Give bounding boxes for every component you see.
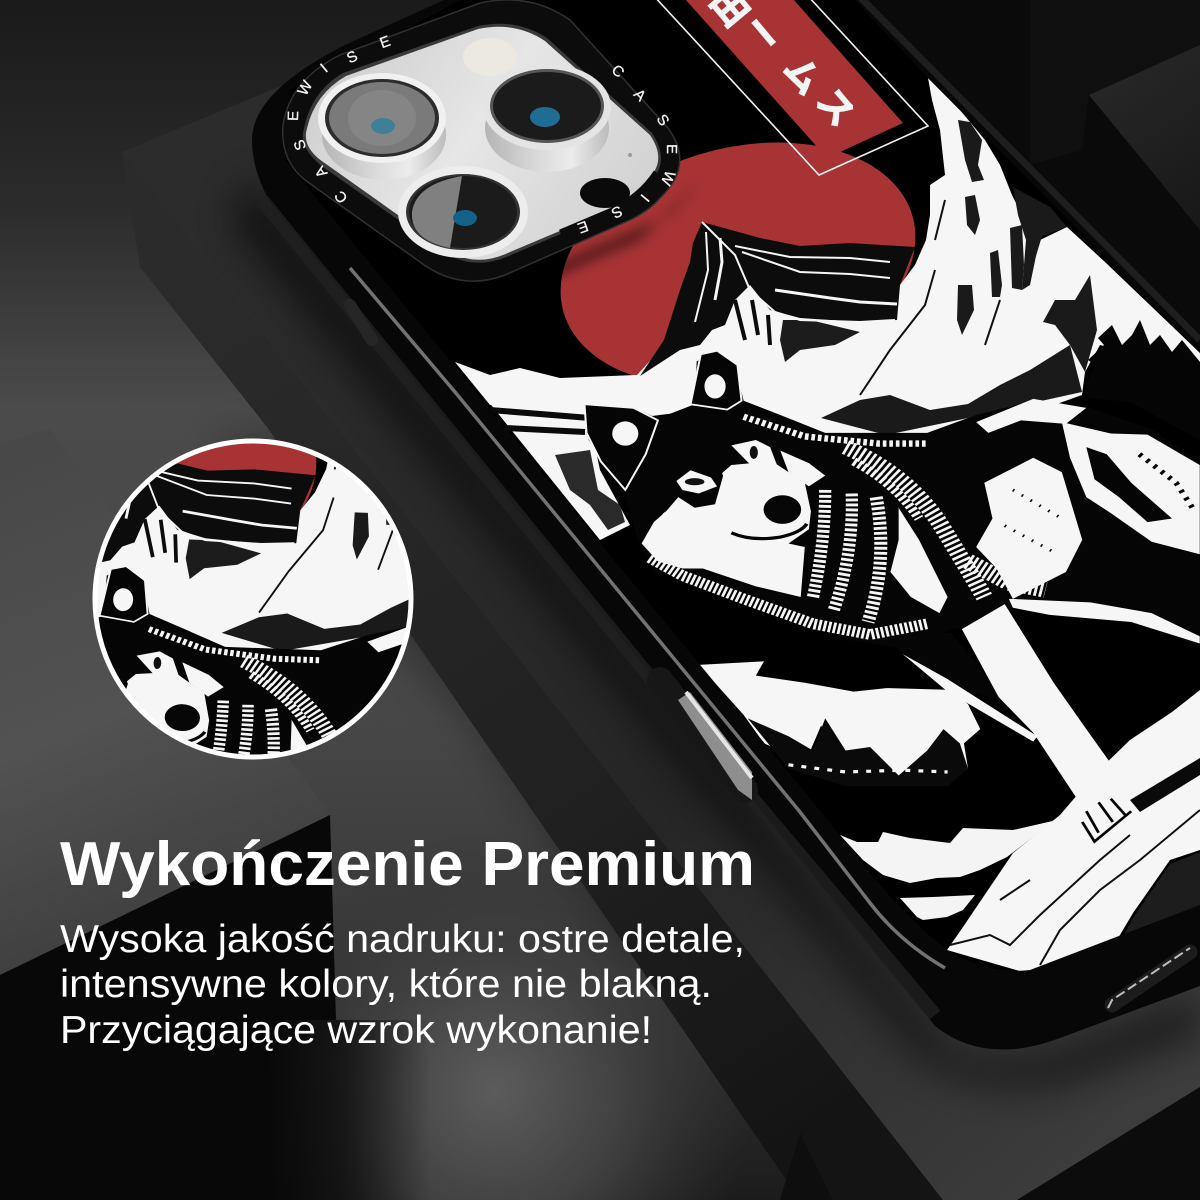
paw toes [1082, 799, 1131, 842]
left ear [584, 404, 658, 490]
flash [463, 38, 517, 76]
microphone hole [580, 178, 630, 208]
wolf [584, 351, 1200, 842]
CASEWISE ring text: W [295, 77, 317, 99]
description text: intensywne kolory, które nie blakną. [60, 963, 712, 1006]
wolf body silhouette [584, 351, 1200, 647]
CASEWISE ring text: W [656, 168, 678, 189]
CASEWISE ring text: I [317, 61, 331, 76]
label characters: ス [808, 80, 863, 134]
white outline frame [653, 0, 928, 175]
face [642, 461, 811, 597]
description text: Przyciągające wzrok wykonanie! [60, 1009, 652, 1052]
side slot [402, 375, 478, 470]
case body [252, 0, 1200, 1050]
right ear patch [704, 374, 726, 399]
dark central mountain [640, 222, 915, 376]
leg inner strip [903, 654, 1037, 742]
snow mountains [455, 78, 1200, 440]
mountain smudge below ridge [780, 320, 860, 362]
rear belly band [1009, 599, 1200, 643]
island outer ring [283, 0, 680, 281]
small rocks lower left [840, 820, 1057, 920]
hip specks [1005, 490, 1062, 554]
ring lower right cover [560, 172, 656, 232]
CASEWISE ring text [285, 33, 680, 236]
right eye patch [731, 440, 778, 470]
lens: telephoto [398, 166, 528, 258]
right eye pupil [750, 446, 758, 459]
dark strips on left hill [490, 410, 590, 432]
hill left of the wolf [491, 405, 630, 540]
haunch shade spots [1139, 454, 1192, 508]
CASEWISE ring text: C [608, 62, 628, 81]
shadow under chest [821, 633, 1009, 704]
silver side button [660, 680, 752, 800]
right ear [691, 351, 742, 410]
CASEWISE ring text: S [344, 48, 360, 67]
magnifier white ring [95, 441, 411, 757]
foreground rock with paw ledge [947, 690, 1200, 972]
red sun [533, 105, 943, 423]
dark eye mask [638, 458, 723, 526]
mountain highlight lines [695, 222, 897, 322]
CASEWISE ring text: E [378, 33, 393, 52]
spikes under ridge [735, 300, 770, 345]
outer rim reflection [858, 0, 1200, 340]
grey hill shadow [555, 450, 625, 530]
red label strip [653, 0, 928, 175]
CASEWISE ring text: A [312, 163, 331, 181]
label characters: ム [775, 48, 830, 102]
back fur [976, 399, 1086, 433]
CASEWISE ring text: S [609, 202, 625, 221]
lens: ultra wide [318, 73, 446, 180]
left eye [676, 470, 717, 494]
description text: Wysoka jakość nadruku: ostre detale, [60, 918, 745, 961]
mid-ground hill with trees [699, 661, 980, 786]
hip patch [976, 458, 1082, 599]
side port [350, 305, 372, 340]
nose [764, 495, 801, 524]
cheek patch [780, 451, 825, 486]
haunch [1062, 422, 1200, 554]
left ear patch [612, 421, 638, 446]
heading: Wykończenie Premium [60, 830, 755, 899]
camera island [283, 0, 700, 300]
CASEWISE ring text: S [291, 137, 310, 152]
mane fur stripes [650, 417, 1046, 635]
lens: main [483, 64, 611, 172]
label characters: ー [735, 6, 790, 60]
CASEWISE ring text: I [637, 191, 652, 205]
CASEWISE ring text: E [663, 144, 680, 154]
bottom port [1108, 948, 1190, 1008]
mountain rock streaks [821, 120, 1097, 435]
CASEWISE ring text: C [331, 187, 351, 206]
circular detail magnifier [0, 204, 592, 1173]
CASEWISE ring text: E [575, 217, 590, 236]
side rim highlight [350, 268, 945, 968]
CASEWISE ring text: A [630, 86, 649, 105]
phone in glossy black case [235, 0, 1200, 1084]
fir trees right [1088, 320, 1200, 372]
camera glass plate [306, 27, 658, 260]
foreleg [962, 604, 1109, 797]
description text [60, 918, 745, 1052]
haunch dark shade [1086, 447, 1172, 522]
small sensor dot [628, 153, 632, 157]
phone drop shadow [235, 180, 1200, 1084]
island shadow on artwork [440, 180, 700, 300]
label characters [702, 0, 863, 134]
chest white shape [890, 508, 948, 613]
mountain crack lines [860, 200, 1000, 395]
side rim sheen [262, 200, 935, 1015]
CASEWISE ring text: S [653, 111, 672, 129]
inner ring gloss [303, 24, 661, 263]
mouth line [731, 524, 807, 539]
CASEWISE ring text: E [285, 111, 302, 121]
left eye pupil [685, 478, 704, 485]
printed wolf artwork [455, 0, 1200, 971]
